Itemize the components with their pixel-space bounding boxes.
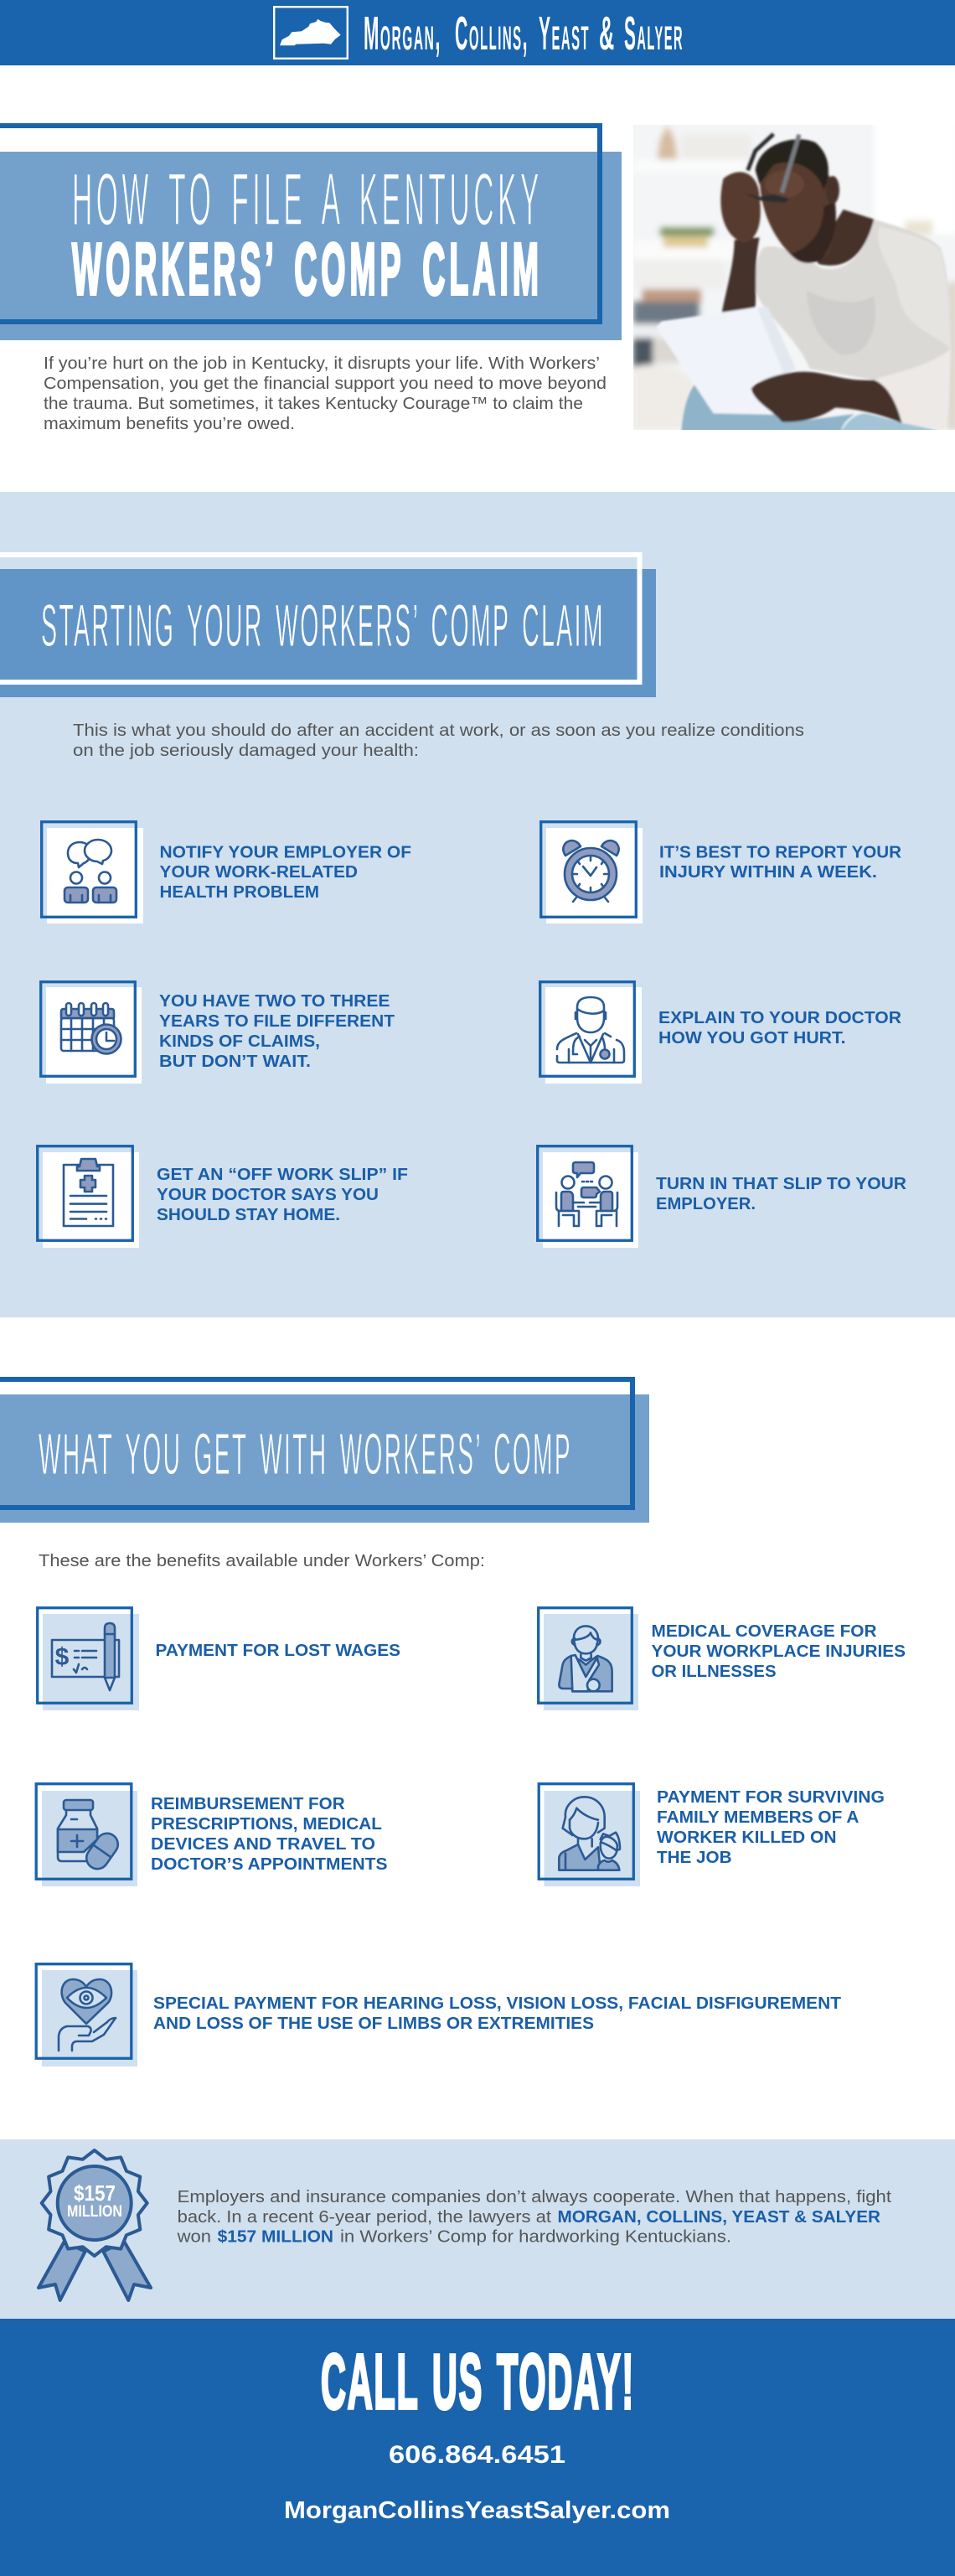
section heading bbox=[0, 555, 656, 697]
raised forearm bbox=[722, 237, 760, 313]
step: off work slip bbox=[38, 1146, 408, 1248]
intro text: maximum benefits you’re owed. bbox=[44, 414, 295, 433]
intro text bbox=[44, 354, 607, 433]
benefit text: SPECIAL PAYMENT FOR HEARING LOSS, VISION LOSS, FACIAL DISFIGUREMENT bbox=[153, 1994, 841, 2013]
step text: EMPLOYER. bbox=[656, 1194, 756, 1213]
step text: SHOULD STAY HOME. bbox=[157, 1205, 340, 1224]
step text: YOU HAVE TWO TO THREE bbox=[159, 991, 390, 1011]
icon: Kentucky logo bbox=[274, 7, 348, 59]
icon: award ribbon bbox=[39, 2150, 151, 2300]
step text: BUT DON’T WAIT. bbox=[159, 1052, 311, 1071]
icon: meeting at table bbox=[556, 1162, 617, 1226]
header bar bbox=[0, 0, 955, 65]
step text bbox=[159, 991, 395, 1071]
step text: IT’S BEST TO REPORT YOUR bbox=[659, 843, 901, 861]
step text: YOUR WORK-RELATED bbox=[159, 862, 358, 882]
step text: HOW YOU GOT HURT. bbox=[658, 1028, 846, 1047]
neck bbox=[815, 209, 874, 266]
step text bbox=[658, 1008, 901, 1047]
head bbox=[760, 155, 836, 263]
callout text: won bbox=[177, 2227, 211, 2246]
step: explain to doctor bbox=[540, 982, 901, 1084]
step text: YOUR DOCTOR SAYS YOU bbox=[157, 1185, 379, 1204]
step text: YEARS TO FILE DIFFERENT bbox=[159, 1011, 395, 1031]
benefit: reimbursement bbox=[36, 1784, 387, 1886]
step text bbox=[159, 843, 411, 902]
step text: TURN IN THAT SLIP TO YOUR bbox=[656, 1174, 906, 1193]
icon: two people talking bbox=[65, 840, 116, 903]
photo: worried man reading papers bbox=[633, 117, 955, 432]
icon: clipboard bbox=[64, 1159, 113, 1226]
icon: doctor bbox=[557, 997, 624, 1063]
panel: hero title bbox=[0, 126, 622, 340]
benefit text: YOUR WORKPLACE INJURIES bbox=[652, 1642, 906, 1661]
firm name bbox=[364, 7, 684, 60]
step text bbox=[157, 1165, 408, 1224]
icon: injured worker with sling bbox=[559, 1626, 612, 1691]
step: report within a week bbox=[541, 822, 901, 923]
firm name: Collins, bbox=[455, 7, 529, 60]
callout text: Employers and insurance companies don’t always cooperate. When that happens, fight bbox=[178, 2187, 891, 2206]
benefit: medical coverage bbox=[539, 1608, 906, 1710]
benefit: lost wages bbox=[38, 1608, 400, 1710]
phone number: 606.864.6451 bbox=[389, 2441, 565, 2469]
step: turn in slip bbox=[538, 1146, 906, 1248]
step text: HEALTH PROBLEM bbox=[159, 882, 319, 902]
panel: results callout bbox=[0, 2139, 955, 2319]
step: notify employer bbox=[42, 822, 411, 923]
benefit text: DOCTOR’S APPOINTMENTS bbox=[151, 1854, 387, 1874]
icon: mother and child bbox=[559, 1797, 620, 1870]
header bar: Salyer bbox=[624, 7, 684, 60]
firm name: Morgan, bbox=[364, 7, 441, 60]
section intro: These are the benefits available under Workers’ Comp: bbox=[39, 1551, 485, 1570]
section intro: on the job seriously damaged your health: bbox=[73, 741, 419, 760]
benefit text bbox=[153, 1994, 841, 2033]
callout text: $157 MILLION bbox=[218, 2227, 333, 2246]
icon: award ribbon: MILLION bbox=[67, 2203, 122, 2221]
step: filing deadline bbox=[41, 982, 395, 1084]
benefit: special payment bbox=[36, 1964, 841, 2066]
icon: check and pen bbox=[52, 1623, 119, 1690]
benefit text: FAMILY MEMBERS OF A bbox=[657, 1808, 860, 1827]
section heading bbox=[0, 1379, 649, 1523]
raised hand bbox=[720, 172, 761, 243]
benefit text: THE JOB bbox=[657, 1848, 732, 1867]
title bbox=[72, 158, 543, 310]
benefit: surviving family bbox=[539, 1784, 885, 1886]
benefit text bbox=[657, 1787, 885, 1867]
benefit text: OR ILLNESSES bbox=[652, 1662, 776, 1681]
benefit text: PAYMENT FOR LOST WAGES bbox=[156, 1641, 400, 1660]
benefit text: MEDICAL COVERAGE FOR bbox=[652, 1622, 877, 1641]
papers bbox=[656, 308, 785, 413]
benefit text: DEVICES AND TRAVEL TO bbox=[151, 1834, 375, 1854]
benefit text bbox=[652, 1622, 906, 1681]
glasses bbox=[748, 134, 773, 170]
icon: pill bottle and capsule bbox=[58, 1800, 122, 1873]
benefit text: AND LOSS OF THE USE OF LIMBS OR EXTREMITIES bbox=[153, 2014, 594, 2033]
icon: calendar and clock bbox=[61, 1003, 121, 1054]
benefit text: PRESCRIPTIONS, MEDICAL bbox=[151, 1814, 382, 1834]
step text: NOTIFY YOUR EMPLOYER OF bbox=[159, 843, 411, 861]
icon: check and pen: $ bbox=[55, 1643, 70, 1671]
callout text: in Workers’ Comp for hardworking Kentuckians. bbox=[340, 2227, 731, 2246]
firm name: & bbox=[599, 7, 616, 60]
step text bbox=[659, 843, 901, 882]
intro text: Compensation, you get the financial support you need to move beyond bbox=[44, 374, 607, 393]
benefit text: PAYMENT FOR SURVIVING bbox=[657, 1787, 885, 1807]
icon: heart, eye and hand bbox=[59, 1979, 116, 2051]
section intro bbox=[73, 721, 804, 760]
intro text: If you’re hurt on the job in Kentucky, it disrupts your life. With Workers’ bbox=[44, 354, 600, 373]
panel: starting your claim bbox=[0, 492, 955, 1317]
intro text: the trauma. But sometimes, it takes Kentucky Courage™ to claim the bbox=[44, 394, 583, 413]
step text: GET AN “OFF WORK SLIP” IF bbox=[157, 1165, 408, 1184]
benefit text bbox=[151, 1794, 387, 1874]
benefit text: REIMBURSEMENT FOR bbox=[151, 1794, 345, 1813]
step text: EXPLAIN TO YOUR DOCTOR bbox=[658, 1008, 901, 1027]
step text: KINDS OF CLAIMS, bbox=[159, 1032, 320, 1051]
step text bbox=[656, 1174, 906, 1213]
callout text: MORGAN, COLLINS, YEAST & SALYER bbox=[558, 2208, 881, 2227]
icon: award ribbon: $157 bbox=[74, 2180, 116, 2206]
callout text bbox=[177, 2187, 891, 2246]
benefit text: WORKER KILLED ON bbox=[657, 1828, 836, 1847]
panel: what you get bbox=[0, 1379, 906, 2066]
callout text: back. In a recent 6-year period, the lawyers at bbox=[178, 2207, 551, 2227]
lower hand and forearm bbox=[751, 372, 902, 423]
jeans bbox=[681, 384, 854, 432]
firm name: Yeast bbox=[539, 7, 590, 60]
section intro: This is what you should do after an accident at work, or as soon as you realize conditions bbox=[73, 721, 804, 740]
website: MorganCollinsYeastSalyer.com bbox=[284, 2497, 670, 2524]
panel: footer call to action bbox=[0, 2319, 955, 2576]
shirt bbox=[755, 220, 951, 430]
icon: alarm clock bbox=[563, 841, 619, 902]
step text: INJURY WITHIN A WEEK. bbox=[659, 862, 877, 882]
